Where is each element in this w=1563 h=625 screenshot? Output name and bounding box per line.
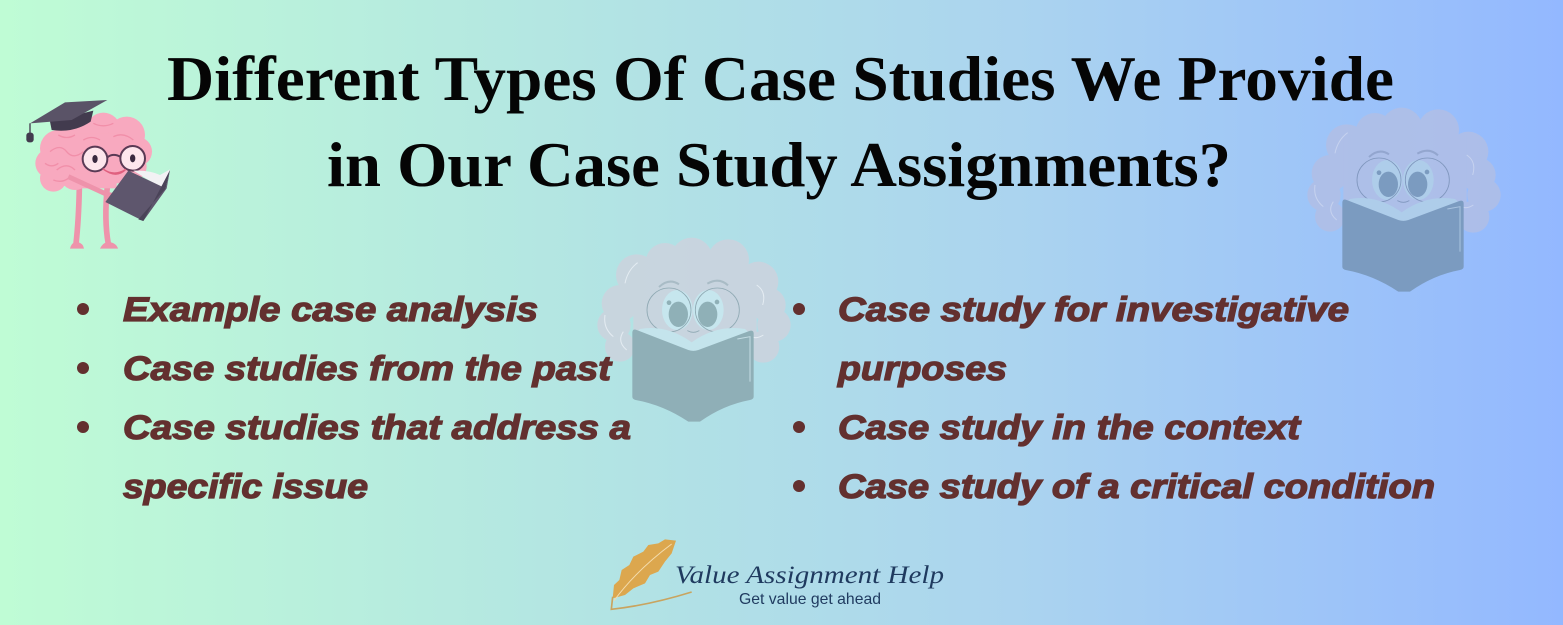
logo tagline: Get value get ahead <box>739 591 881 608</box>
list item: critical condition: Case study of a critical condition <box>838 468 1435 506</box>
list item: specific issue, line 1: Case studies that address a <box>123 409 631 447</box>
list item: investigative, line 2: purposes <box>837 350 1007 388</box>
title <box>167 43 1394 200</box>
icon: feather quill <box>611 539 692 609</box>
list item: example case analysis: Example case analysis <box>123 291 538 329</box>
list item: specific issue, line 2: specific issue <box>123 468 368 506</box>
list item: case studies from the past: Case studies from the past <box>123 350 613 388</box>
left bullet list <box>77 291 631 506</box>
logo name: Value Assignment Help <box>675 562 944 589</box>
title line 1: Different Types Of Case Studies We Provide <box>167 43 1394 114</box>
list item: investigative, line 1: Case study for investigative <box>838 291 1349 329</box>
icon: pink brain with graduation cap and book <box>26 100 170 249</box>
icon: faded brain reading book, right <box>1307 108 1501 292</box>
title line 2: in Our Case Study Assignments? <box>327 129 1231 200</box>
list item: in the context: Case study in the context <box>838 409 1302 447</box>
icon: faded brain reading book, centre <box>597 238 791 422</box>
right bullet list <box>793 291 1435 506</box>
logo: Value Assignment Help <box>611 539 944 609</box>
